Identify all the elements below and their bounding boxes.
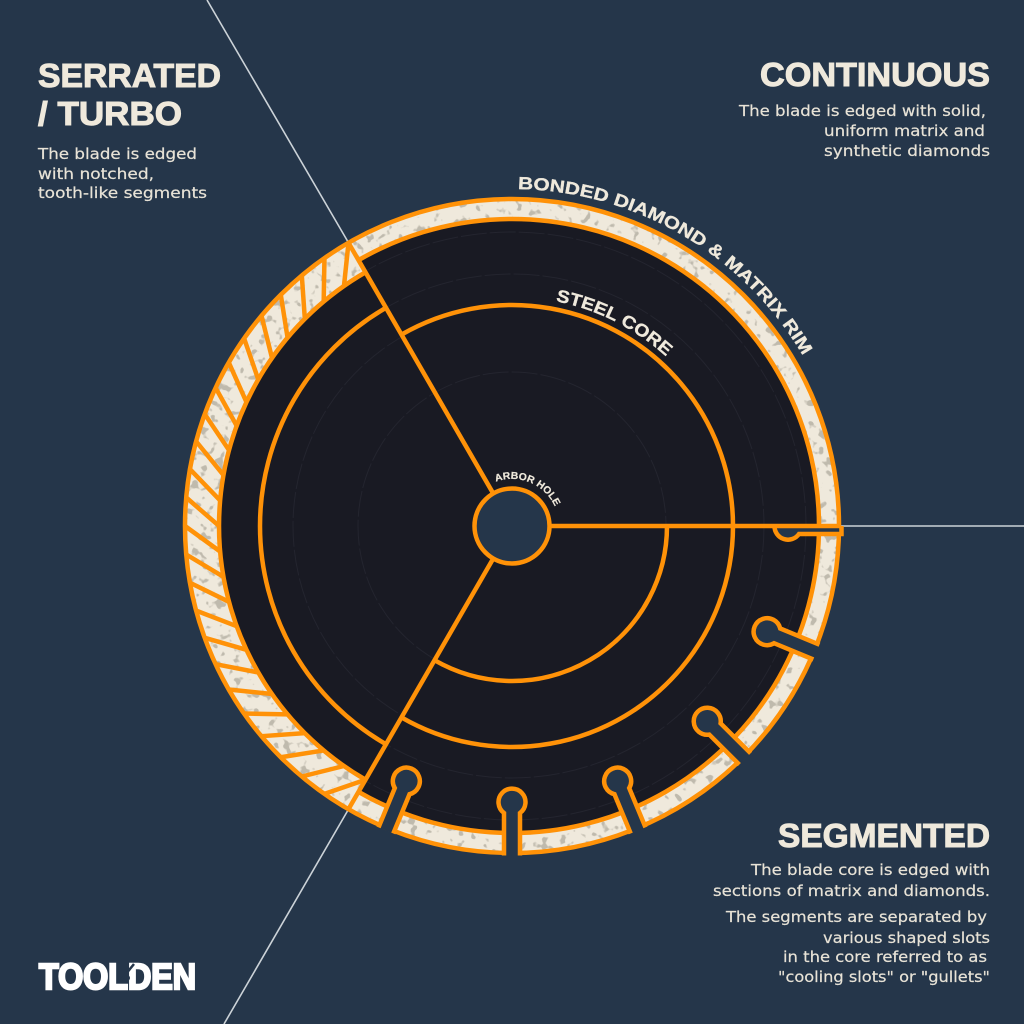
callout leader lines [207, 0, 1024, 1024]
description: sections of matrix and diamonds. [713, 882, 990, 900]
label: bonded diamond and matrix rim: BONDED DIAMOND & MATRIX RIM [519, 176, 813, 355]
description [713, 861, 990, 986]
panel: segmented [713, 817, 990, 986]
steel core rings [260, 305, 733, 747]
description: with notched, [38, 165, 154, 183]
blade diagram [184, 199, 842, 856]
faint dashed core rings [218, 232, 806, 820]
description [738, 102, 990, 160]
section dividers [348, 241, 841, 811]
description: The blade is edged [37, 145, 197, 163]
heading: SERRATED [38, 57, 221, 94]
arbor hole [474, 488, 550, 564]
description: various shaped slots [823, 929, 990, 947]
description: in the core referred to as [783, 948, 987, 966]
description: synthetic diamonds [824, 142, 990, 160]
heading [38, 57, 221, 132]
cooling slots / gullets [373, 526, 842, 856]
label: arbor hole: ARBOR HOLE [496, 472, 561, 506]
serrated turbo teeth [184, 243, 366, 808]
description: The blade core is edged with [750, 861, 990, 879]
heading: CONTINUOUS [760, 56, 990, 93]
description [37, 145, 207, 202]
label: steel core: STEEL CORE [556, 290, 674, 356]
blade core disc [205, 219, 819, 833]
panel: continuous [738, 56, 990, 160]
description: "cooling slots" or "gullets" [778, 968, 990, 986]
logo: Toolden: TOOLDEN [39, 956, 196, 997]
heading: SEGMENTED [778, 817, 990, 854]
description: The blade is edged with solid, [738, 102, 986, 120]
description: The segments are separated by [725, 908, 987, 926]
speckled diamond matrix rim [202, 208, 830, 843]
panel: serrated / turbo [37, 57, 221, 202]
heading: / TURBO [38, 95, 182, 132]
description: uniform matrix and [824, 122, 985, 140]
rim outlines [185, 199, 839, 853]
description: tooth-like segments [38, 184, 207, 202]
